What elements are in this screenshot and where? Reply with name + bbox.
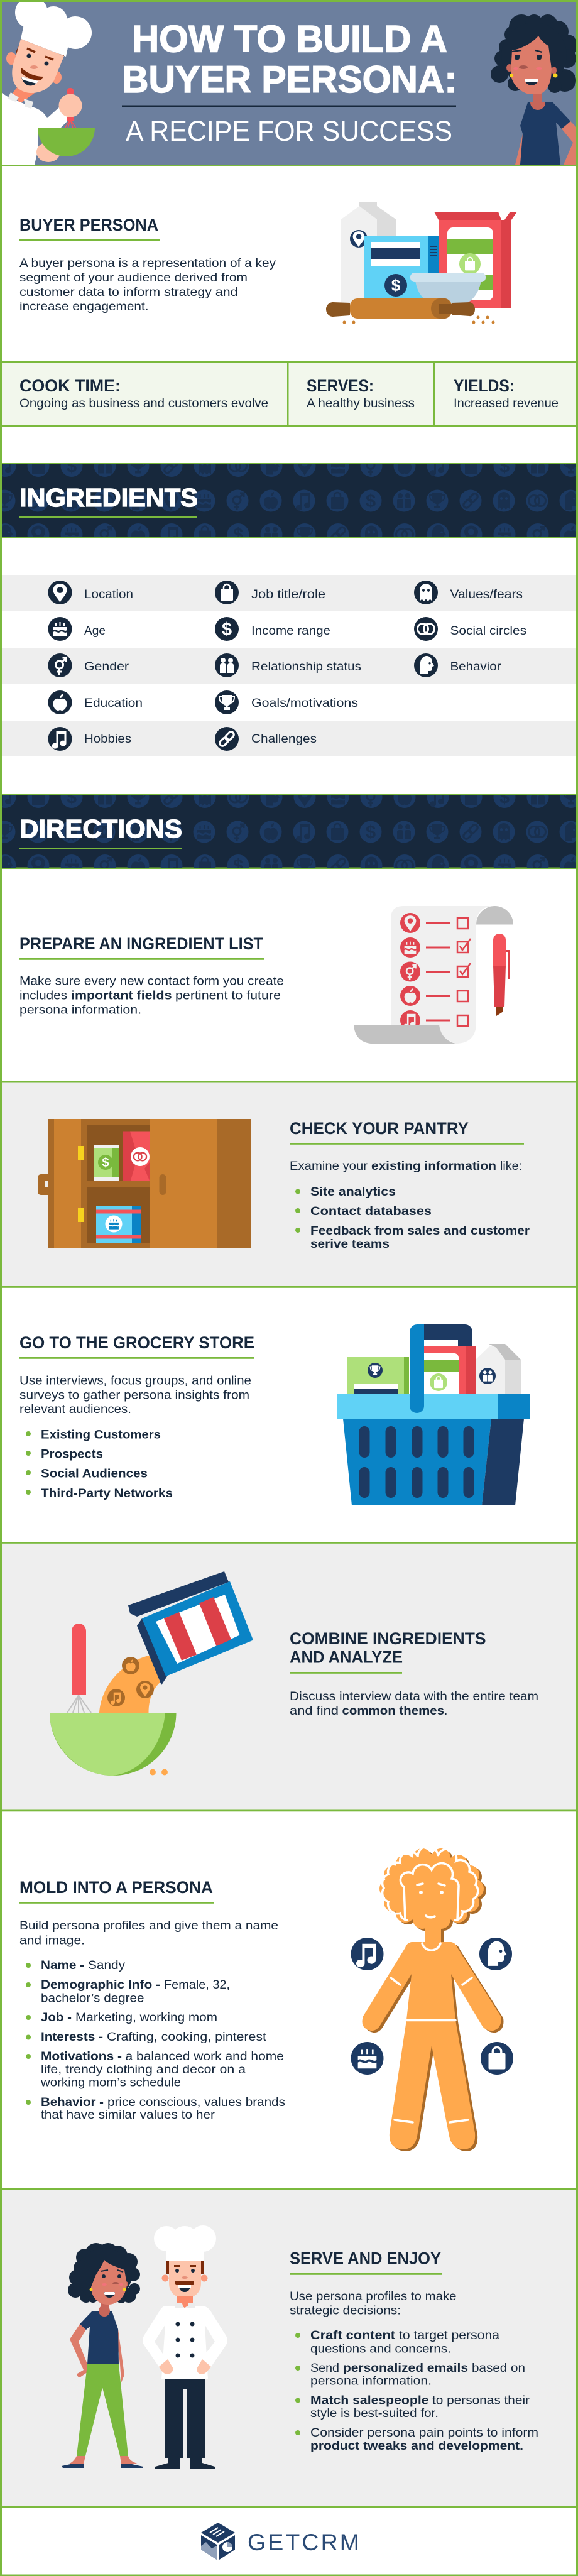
panel: header xyxy=(0,0,578,165)
text: prepare body: important fields xyxy=(71,989,172,1003)
icon and label: challenges xyxy=(215,727,317,751)
bullets: audiences: Prospects xyxy=(41,1448,103,1461)
text: mold body xyxy=(19,1919,278,1948)
illustration: chef xyxy=(143,2225,227,2469)
icon and label: gender: Gender xyxy=(84,660,129,674)
illustration: checklist scroll and pen xyxy=(354,906,513,1044)
yields xyxy=(454,376,559,410)
cook time xyxy=(19,376,268,410)
bullets: audiences xyxy=(26,1429,173,1500)
heading: mold: MOLD INTO A PERSONA xyxy=(19,1878,213,1897)
icon and label: relationship status xyxy=(215,653,361,677)
bullets: audiences: Existing Customers xyxy=(41,1429,161,1441)
text: serve body xyxy=(290,2290,456,2317)
panel: combine ingredients and analyze xyxy=(0,1542,578,1811)
cook time: Ongoing as business and customers evolve xyxy=(19,397,268,410)
banner: ingredients: INGREDIENTS xyxy=(19,483,198,512)
serves: SERVES: xyxy=(307,376,374,395)
text: combine body: and find xyxy=(290,1705,339,1718)
bullets: strategic decisions: persona information. xyxy=(310,2375,432,2388)
text: prepare body: pertinent to future xyxy=(175,989,281,1003)
bullets: strategic decisions: Match salespeople xyxy=(310,2394,428,2408)
bullets: pantry: Feedback from sales and customer xyxy=(310,1225,530,1238)
bullets: pantry xyxy=(295,1186,530,1251)
text: prepare body: persona information. xyxy=(19,1004,141,1017)
bullets: persona profile: Name - xyxy=(41,1959,84,1972)
text: prepare body: includes xyxy=(19,989,67,1003)
title xyxy=(122,18,457,147)
text: grocery body: Use interviews, focus groups, and online xyxy=(19,1375,251,1387)
serves xyxy=(307,376,415,410)
panel: check your pantry xyxy=(0,1081,578,1288)
bullets: persona profile: bachelor’s degree xyxy=(41,1992,144,2006)
illustration: woman persona xyxy=(491,14,578,165)
bullets: persona profile: Marketing, working mom xyxy=(75,2011,217,2024)
icon and label: hobbies xyxy=(48,727,131,751)
bullets: strategic decisions: Send xyxy=(310,2362,339,2375)
icon and label: goals xyxy=(215,690,358,714)
heading: pantry: CHECK YOUR PANTRY xyxy=(290,1119,469,1138)
bullets: persona profile: Interests - xyxy=(41,2031,103,2044)
bullets: persona profile: working mom’s schedule xyxy=(40,2076,181,2090)
panel: buyer persona xyxy=(19,202,517,324)
text: pantry intro: Examine your xyxy=(290,1160,368,1173)
icon and label: income range xyxy=(215,617,330,641)
text: mold body: Build persona profiles and give them a name xyxy=(19,1919,278,1933)
text: definition: A buyer persona is a representation of a key xyxy=(19,257,276,270)
bullets: strategic decisions: product tweaks and development. xyxy=(310,2440,523,2453)
bullets: strategic decisions: to personas their xyxy=(432,2394,530,2408)
text: definition: segment of your audience derived from xyxy=(19,271,248,285)
text: grocery body xyxy=(19,1375,251,1416)
icon and label: gender xyxy=(48,653,129,677)
text: mold body: and image. xyxy=(19,1934,85,1948)
bullets: persona profile: that have similar values to her xyxy=(41,2109,215,2122)
icon and label: job title: Job title/role xyxy=(251,588,325,601)
heading: prepare: PREPARE AN INGREDIENT LIST xyxy=(19,934,263,953)
icon and label: location xyxy=(48,581,133,604)
icon and label: social circles: Social circles xyxy=(450,625,526,638)
panel: prepare an ingredient list xyxy=(19,906,513,1044)
icon and label: values xyxy=(414,581,523,604)
icon and label: hobbies: Hobbies xyxy=(84,733,131,746)
icon and label: goals: Goals/motivations xyxy=(251,697,358,710)
text: pantry intro: existing information xyxy=(371,1160,496,1173)
illustration: chef whisking xyxy=(2,0,95,165)
illustration: pantry cabinet xyxy=(38,1119,251,1248)
bullets: pantry: serive teams xyxy=(310,1238,390,1251)
yields: YIELDS: xyxy=(454,376,515,395)
bullets: strategic decisions: personalized emails xyxy=(343,2362,468,2375)
bullets: strategic decisions: Craft content xyxy=(310,2329,396,2342)
bullets: pantry: Site analytics xyxy=(310,1186,396,1199)
banner: directions xyxy=(2,794,576,869)
icon and label: relationship status: Relationship status xyxy=(251,660,361,674)
icon and label: location: Location xyxy=(84,588,133,601)
icon and label: age: Age xyxy=(84,625,106,638)
serves: A healthy business xyxy=(307,397,415,410)
icon and label: education xyxy=(48,690,143,714)
text: grocery body: relevant audiences. xyxy=(19,1403,131,1416)
icon and label: challenges: Challenges xyxy=(251,733,317,746)
heading: grocery: GO TO THE GROCERY STORE xyxy=(19,1333,254,1352)
illustration: grocery basket xyxy=(337,1324,530,1505)
bullets: persona profile: Demographic Info - xyxy=(41,1978,160,1992)
icon: cube logo xyxy=(201,2523,235,2560)
bullets: strategic decisions: to target persona xyxy=(399,2329,499,2342)
text: combine body: . xyxy=(444,1705,447,1718)
bullets: audiences: Social Audiences xyxy=(41,1468,148,1480)
bullets: persona profile: a balanced work and home xyxy=(126,2050,284,2063)
bullets: persona profile xyxy=(26,1959,285,2122)
icon and label: values: Values/fears xyxy=(450,588,523,601)
text: combine body xyxy=(290,1690,538,1718)
bullets: pantry: Contact databases xyxy=(310,1205,432,1218)
heading: combine: COMBINE INGREDIENTS xyxy=(290,1629,486,1648)
icon and label: job title xyxy=(215,581,325,604)
bullets: persona profile: Crafting, cooking, pinterest xyxy=(107,2031,267,2044)
banner: ingredients xyxy=(2,463,576,538)
panel: serve and enjoy xyxy=(0,2188,578,2508)
text: grocery body: surveys to gather persona insights from xyxy=(19,1389,249,1402)
text: definition: increase engagement. xyxy=(19,300,148,314)
text: combine body: Discuss interview data with the entire team xyxy=(290,1690,538,1703)
heading: buyer persona: BUYER PERSONA xyxy=(19,216,158,234)
icon and label: income range: Income range xyxy=(251,625,330,638)
cook time: COOK TIME: xyxy=(19,376,121,395)
text: prepare body xyxy=(19,975,284,1017)
text: pantry intro xyxy=(290,1160,522,1173)
bullets: strategic decisions xyxy=(295,2329,538,2453)
bullets: strategic decisions: questions and concerns. xyxy=(310,2342,451,2356)
icon and label: social circles xyxy=(414,617,526,641)
text: serve body: strategic decisions: xyxy=(290,2305,401,2317)
bullets: persona profile: Motivations - xyxy=(41,2050,122,2063)
title: HOW TO BUILD A xyxy=(132,18,447,60)
title: A RECIPE FOR SUCCESS xyxy=(126,115,452,147)
panel: mold into a persona xyxy=(19,1847,513,2151)
panel: ingredients list xyxy=(2,575,576,756)
bullets: persona profile: Female, 32, xyxy=(164,1978,230,1992)
text: combine body: common themes xyxy=(342,1705,444,1718)
panel: recipe facts xyxy=(0,361,578,427)
text: serve body: Use persona profiles to make xyxy=(290,2290,456,2303)
icon and label: education: Education xyxy=(84,697,143,710)
bullets: persona profile: Sandy xyxy=(88,1959,126,1972)
text: definition xyxy=(19,257,276,314)
illustration: pantry ingredients xyxy=(326,202,517,324)
panel: go to the grocery store xyxy=(19,1324,530,1505)
heading: combine: AND ANALYZE xyxy=(290,1647,403,1666)
bullets: strategic decisions: Consider persona pain points to inform xyxy=(310,2426,538,2440)
banner: directions: DIRECTIONS xyxy=(19,814,182,843)
text: definition: customer data to inform strategy and xyxy=(19,286,238,299)
bullets: strategic decisions: style is best-suited for. xyxy=(310,2407,439,2420)
bullets: strategic decisions: based on xyxy=(472,2362,525,2375)
icon and label: age xyxy=(48,617,106,641)
illustration: gingerbread persona xyxy=(351,1847,513,2151)
bullets: persona profile: life, trendy clothing and decor on a xyxy=(41,2063,246,2077)
heading: serve: SERVE AND ENJOY xyxy=(290,2249,441,2268)
illustration: pouring ingredients into bowl xyxy=(50,1571,253,1776)
heading: combine xyxy=(290,1629,486,1674)
title: BUYER PERSONA: xyxy=(122,58,457,101)
illustration: woman xyxy=(62,2243,143,2468)
bullets: persona profile: Behavior - xyxy=(41,2096,104,2109)
icon and label: behavior: Behavior xyxy=(450,660,501,674)
wordmark: GETCRM xyxy=(248,2529,359,2555)
yields: Increased revenue xyxy=(454,397,559,410)
text: prepare body: Make sure every new contact form you create xyxy=(19,975,284,988)
icon and label: behavior xyxy=(414,653,501,677)
bullets: persona profile: price conscious, values brands xyxy=(107,2096,285,2109)
footer: GetCRM logo xyxy=(201,2523,359,2560)
text: pantry intro: like: xyxy=(500,1160,522,1173)
bullets: audiences: Third-Party Networks xyxy=(41,1487,173,1500)
bullets: persona profile: Job - xyxy=(41,2011,72,2024)
